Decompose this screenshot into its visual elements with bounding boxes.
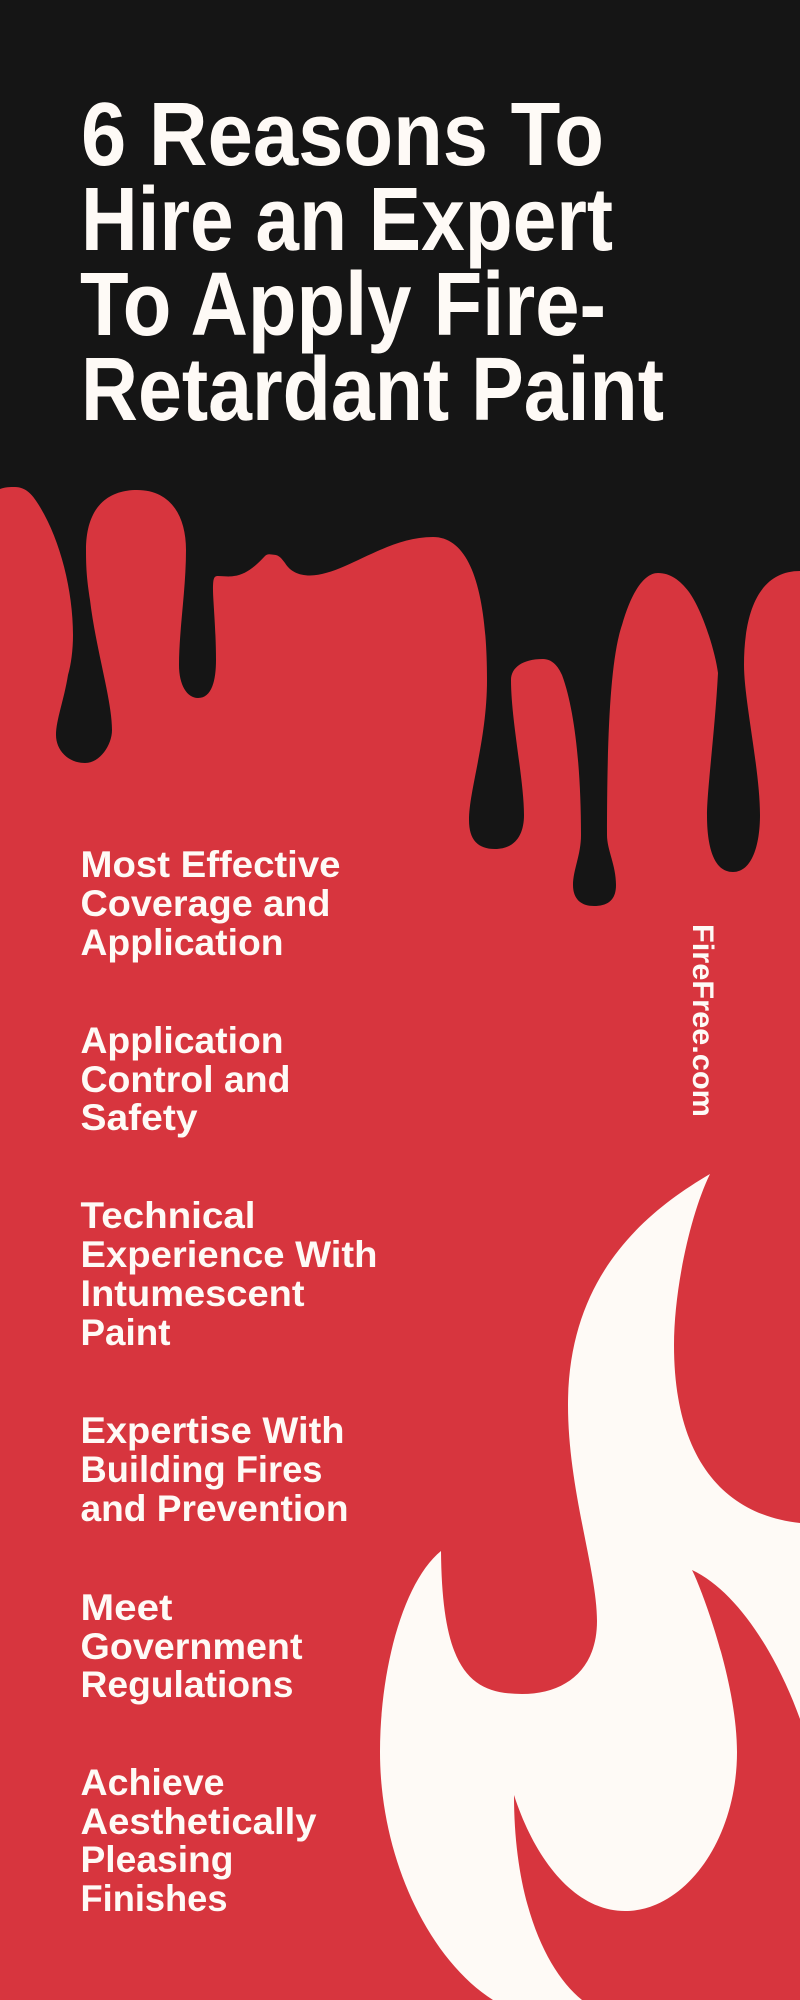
title: Retardant Paint: [81, 340, 664, 440]
reason 1: most effective coverage: [80, 844, 340, 963]
reason 2: application control: [80, 1020, 290, 1138]
reason 5: government regulations: Regulations: [80, 1664, 294, 1705]
brand url: FireFree.com: FireFree.com: [686, 924, 719, 1117]
reason 3: technical experience: Experience With: [80, 1234, 378, 1275]
reason 5: government regulations: Government: [80, 1626, 302, 1667]
title: [80, 85, 664, 440]
reason 4: building fires expertise: Expertise With: [80, 1410, 344, 1451]
reason 1: most effective coverage: Coverage and: [80, 883, 330, 924]
reason 4: building fires expertise: Building Fires: [80, 1449, 322, 1490]
reason 3: technical experience: Intumescent: [80, 1273, 304, 1314]
reason 3: technical experience: Technical: [80, 1195, 256, 1236]
reason 6: aesthetic finishes: Finishes: [80, 1878, 228, 1919]
reason 3: technical experience: [80, 1195, 378, 1353]
reason 1: most effective coverage: Most Effective: [80, 844, 340, 885]
reason 4: building fires expertise: [80, 1410, 348, 1529]
reason 3: technical experience: Paint: [80, 1312, 170, 1353]
reason 2: application control: Application: [80, 1020, 284, 1061]
title: To Apply Fire-: [80, 255, 606, 355]
title: Hire an Expert: [81, 170, 613, 270]
reason 6: aesthetic finishes: Pleasing: [80, 1839, 234, 1880]
reason 5: government regulations: Meet: [80, 1587, 172, 1628]
title: 6 Reasons To: [81, 85, 604, 185]
red paint drip background: [0, 487, 800, 2000]
reason 2: application control: Control and: [80, 1059, 290, 1100]
reason 1: most effective coverage: Application: [80, 922, 284, 963]
icon: flame: [380, 1174, 800, 2000]
reason 5: government regulations: [80, 1587, 302, 1705]
reason 2: application control: Safety: [80, 1097, 198, 1138]
reason 6: aesthetic finishes: Achieve: [80, 1762, 224, 1803]
reason 6: aesthetic finishes: Aesthetically: [80, 1801, 317, 1842]
reason 4: building fires expertise: and Prevention: [80, 1488, 348, 1529]
reason 6: aesthetic finishes: [80, 1762, 317, 1919]
